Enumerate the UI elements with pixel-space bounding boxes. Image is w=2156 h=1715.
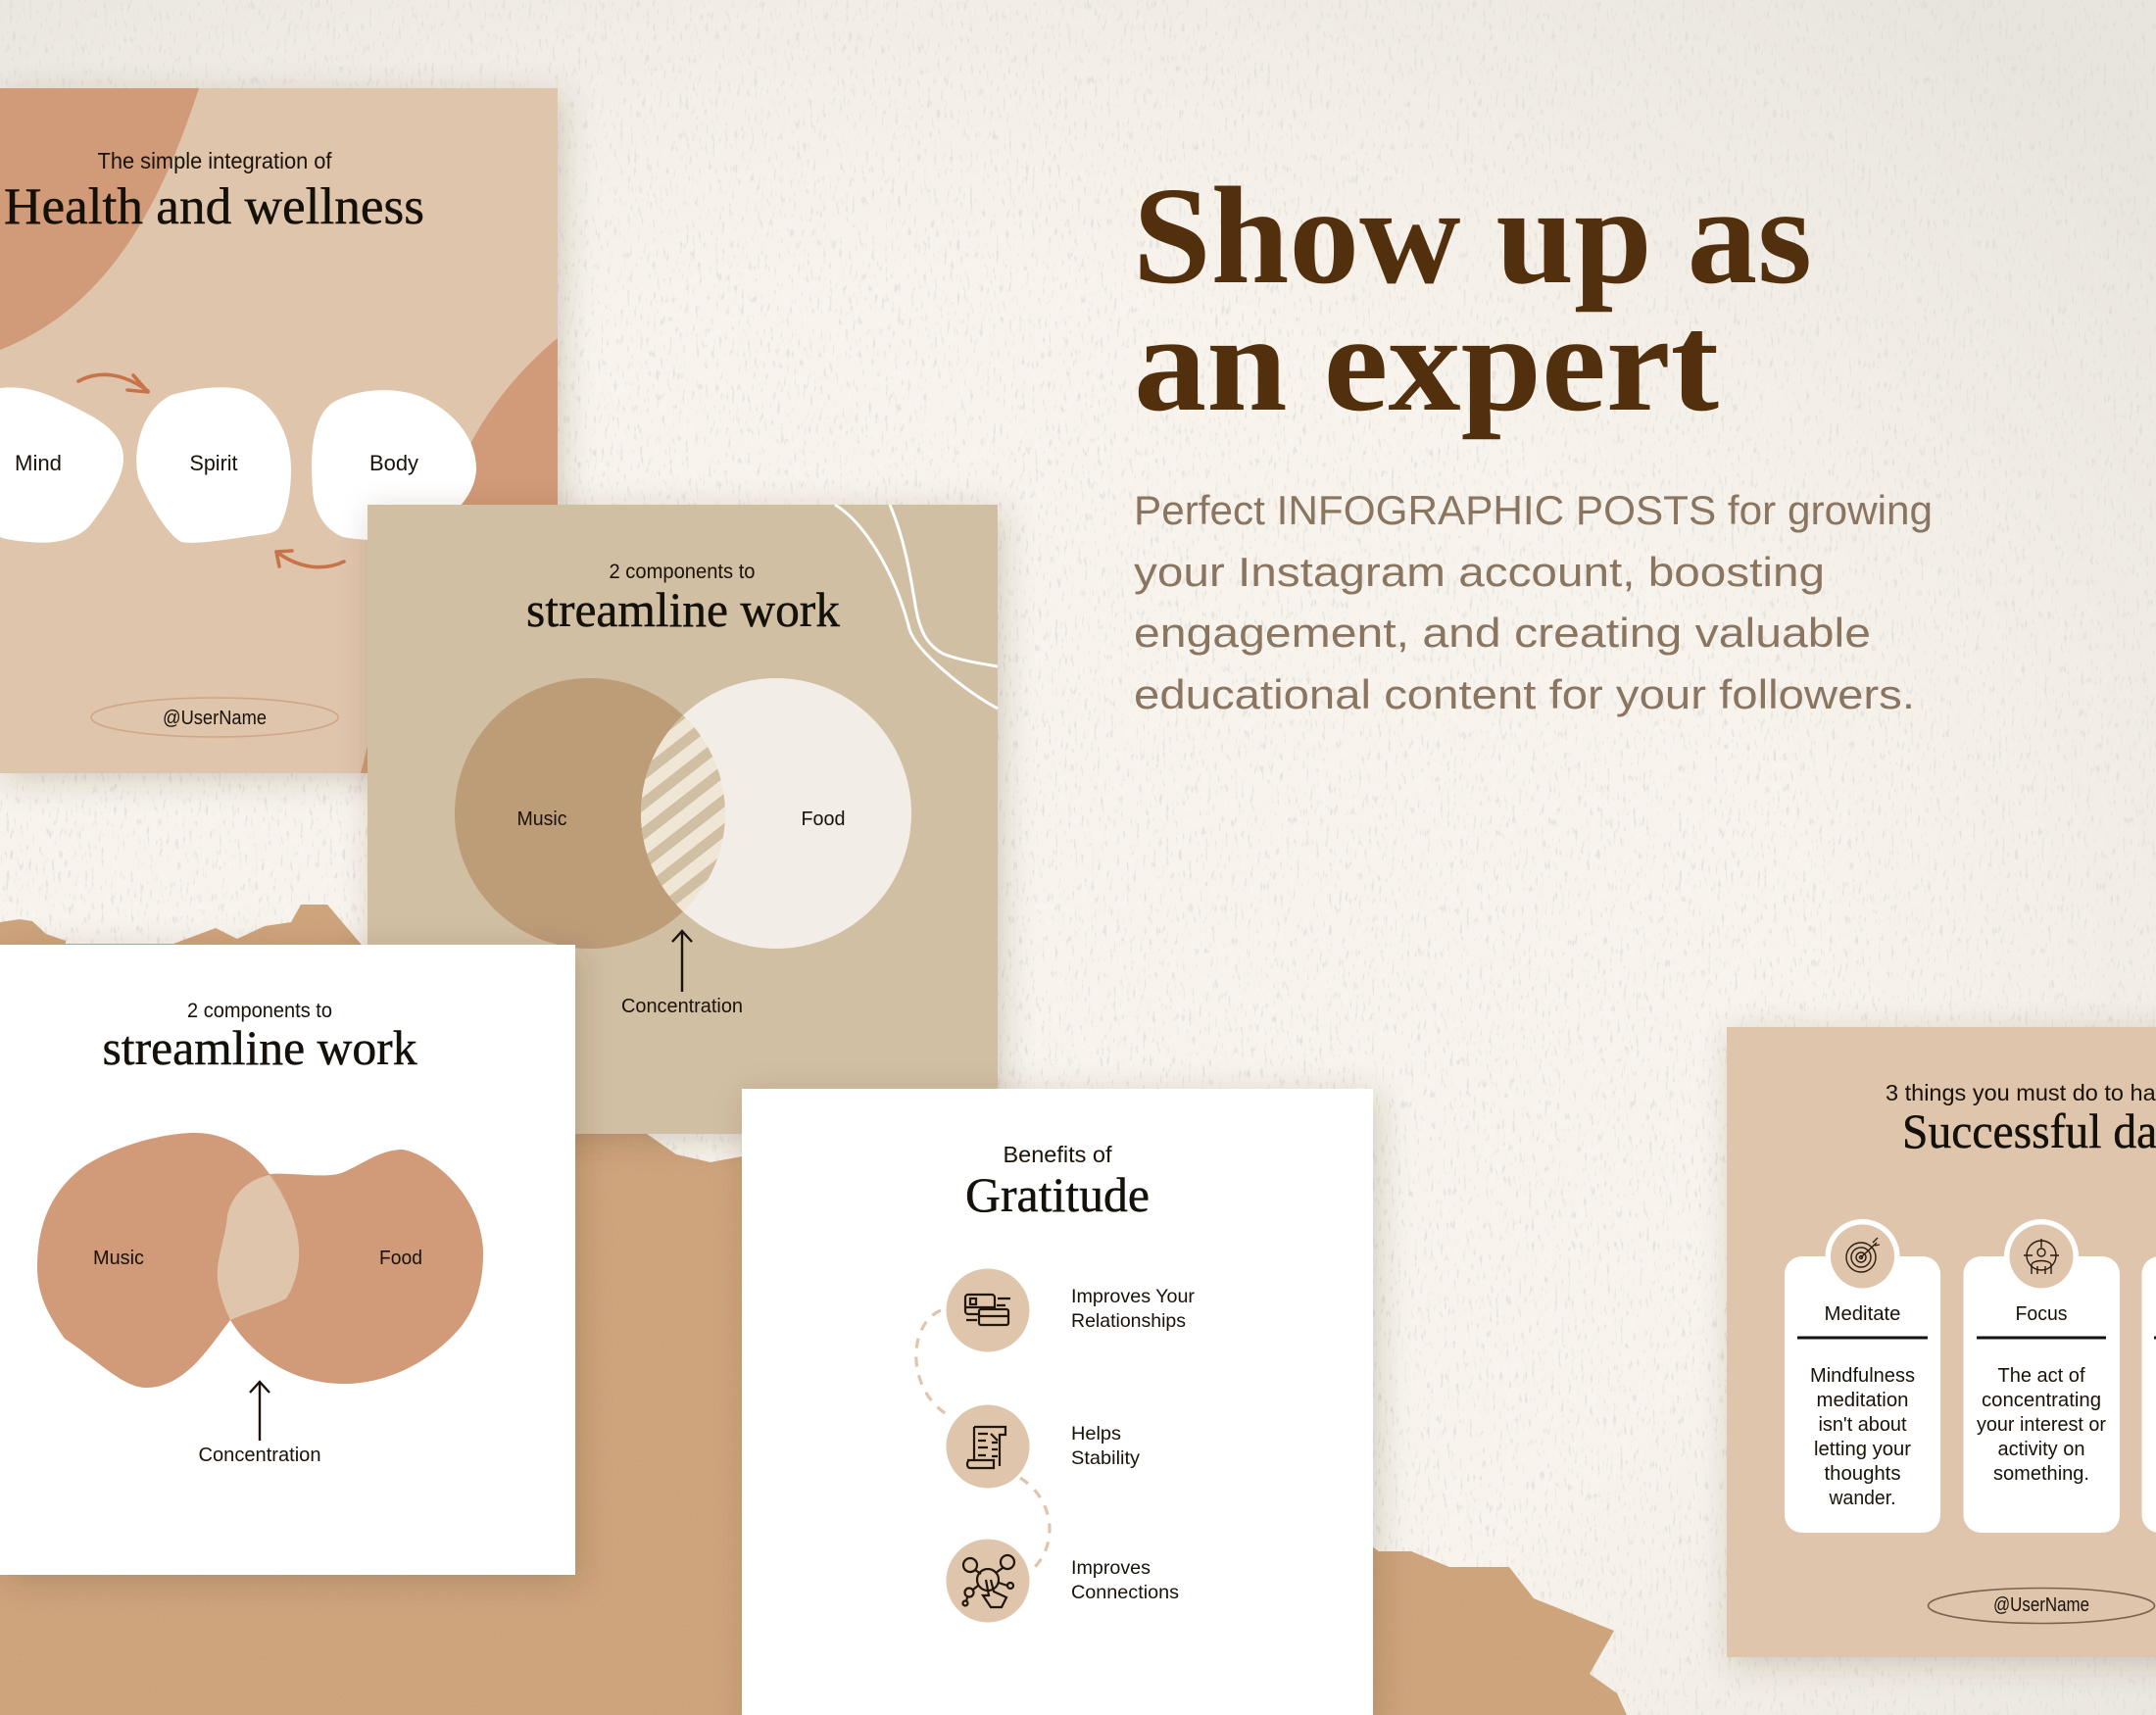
torn kraft paper bbox=[0, 905, 1627, 1715]
tile: focus: activity on bbox=[1997, 1439, 2085, 1460]
heading: an expert bbox=[1134, 285, 1719, 440]
icon: crosshair person bbox=[2024, 1239, 2059, 1274]
benefit: connections: Improves bbox=[1071, 1557, 1151, 1579]
label: concentration: Concentration bbox=[198, 1445, 321, 1466]
benefit: stability bbox=[947, 1405, 1140, 1488]
venn diagram: Music bbox=[517, 808, 566, 830]
subtitle: The simple integration of bbox=[98, 148, 332, 173]
description text: engagement, and creating valuable bbox=[1134, 610, 1871, 656]
organic venn diagram bbox=[37, 1133, 483, 1388]
subtitle: Benefits of bbox=[1004, 1142, 1112, 1167]
icon: target bbox=[1846, 1238, 1880, 1272]
username badge: @UserName bbox=[163, 708, 267, 729]
benefit: stability: Stability bbox=[1071, 1447, 1140, 1469]
tile: focus: your interest or bbox=[1977, 1414, 2106, 1436]
arrow bbox=[250, 1382, 270, 1441]
heading: Show up as bbox=[1133, 158, 1812, 313]
decorative shape: top left bbox=[0, 88, 199, 350]
organic venn diagram: Music bbox=[93, 1248, 144, 1269]
tile: focus: The act of bbox=[1997, 1365, 2085, 1387]
panel: streamline work venn, white bbox=[0, 945, 575, 1575]
description text bbox=[1134, 487, 1933, 717]
decorative white lines bbox=[835, 505, 998, 709]
arrow: body to spirit bbox=[276, 551, 344, 567]
venn diagram: Food bbox=[802, 808, 845, 830]
icon: checklist scroll bbox=[967, 1427, 1005, 1468]
username badge bbox=[1929, 1588, 2154, 1623]
label: concentration: Concentration bbox=[621, 996, 743, 1017]
tile: focus: Focus bbox=[2015, 1303, 2068, 1325]
title: streamline work bbox=[102, 1020, 417, 1075]
decorative shape: right bbox=[361, 338, 558, 773]
tile: meditate: wander. bbox=[1829, 1488, 1895, 1509]
benefit: connections bbox=[947, 1539, 1179, 1623]
benefit: connections: Connections bbox=[1071, 1582, 1179, 1603]
panel: health and wellness bbox=[0, 88, 558, 773]
tile: meditate: meditation bbox=[1817, 1390, 1909, 1411]
description text: your Instagram account, boosting bbox=[1134, 549, 1825, 595]
benefit: relationships bbox=[947, 1268, 1196, 1352]
blob: spirit bbox=[136, 387, 291, 543]
organic venn diagram: Food bbox=[379, 1248, 422, 1269]
tile: meditate: Mindfulness bbox=[1810, 1365, 1915, 1387]
arrow bbox=[672, 931, 692, 992]
tile: third, cropped bbox=[2142, 1256, 2156, 1533]
tile: meditate: isn't about bbox=[1819, 1414, 1907, 1436]
arrow: mind to spirit bbox=[78, 374, 148, 392]
blob: body: Body bbox=[369, 451, 418, 475]
dashed connector one bbox=[916, 1310, 950, 1416]
title: Gratitude bbox=[965, 1167, 1150, 1222]
icon: credit cards bbox=[965, 1295, 1010, 1325]
tile: meditate: Meditate bbox=[1825, 1303, 1901, 1325]
blob: spirit: Spirit bbox=[190, 451, 237, 475]
tile: meditate: thoughts bbox=[1825, 1463, 1901, 1485]
subtitle: 2 components to bbox=[610, 561, 755, 583]
benefit: relationships: Relationships bbox=[1071, 1310, 1186, 1332]
tile: meditate bbox=[1785, 1219, 1940, 1533]
blob: body bbox=[312, 390, 476, 540]
dashed connector two bbox=[1020, 1478, 1050, 1568]
title: streamline work bbox=[526, 582, 840, 637]
icon: network touch bbox=[962, 1555, 1014, 1607]
panel: benefits of gratitude bbox=[742, 1089, 1373, 1715]
description text: educational content for your followers. bbox=[1134, 671, 1915, 717]
title: Health and wellness bbox=[4, 178, 424, 235]
benefit: stability: Helps bbox=[1071, 1423, 1121, 1445]
username badge bbox=[91, 698, 338, 737]
username badge: @UserName bbox=[1993, 1594, 2089, 1616]
heading bbox=[1133, 158, 1812, 440]
tile: focus: concentrating bbox=[1982, 1390, 2101, 1411]
tile: meditate: letting your bbox=[1814, 1439, 1911, 1460]
subtitle: 2 components to bbox=[187, 1000, 332, 1022]
blob: mind: Mind bbox=[15, 451, 62, 475]
description text: Perfect INFOGRAPHIC POSTS for growing bbox=[1134, 487, 1933, 533]
tile: focus bbox=[1964, 1219, 2120, 1533]
benefit: relationships: Improves Your bbox=[1071, 1286, 1196, 1307]
panel: successful day bbox=[1727, 1027, 2156, 1657]
blob: mind bbox=[0, 387, 123, 543]
venn diagram bbox=[455, 678, 911, 949]
panel: streamline work venn, tan bbox=[368, 505, 998, 1134]
tile: focus: something. bbox=[1993, 1463, 2089, 1485]
